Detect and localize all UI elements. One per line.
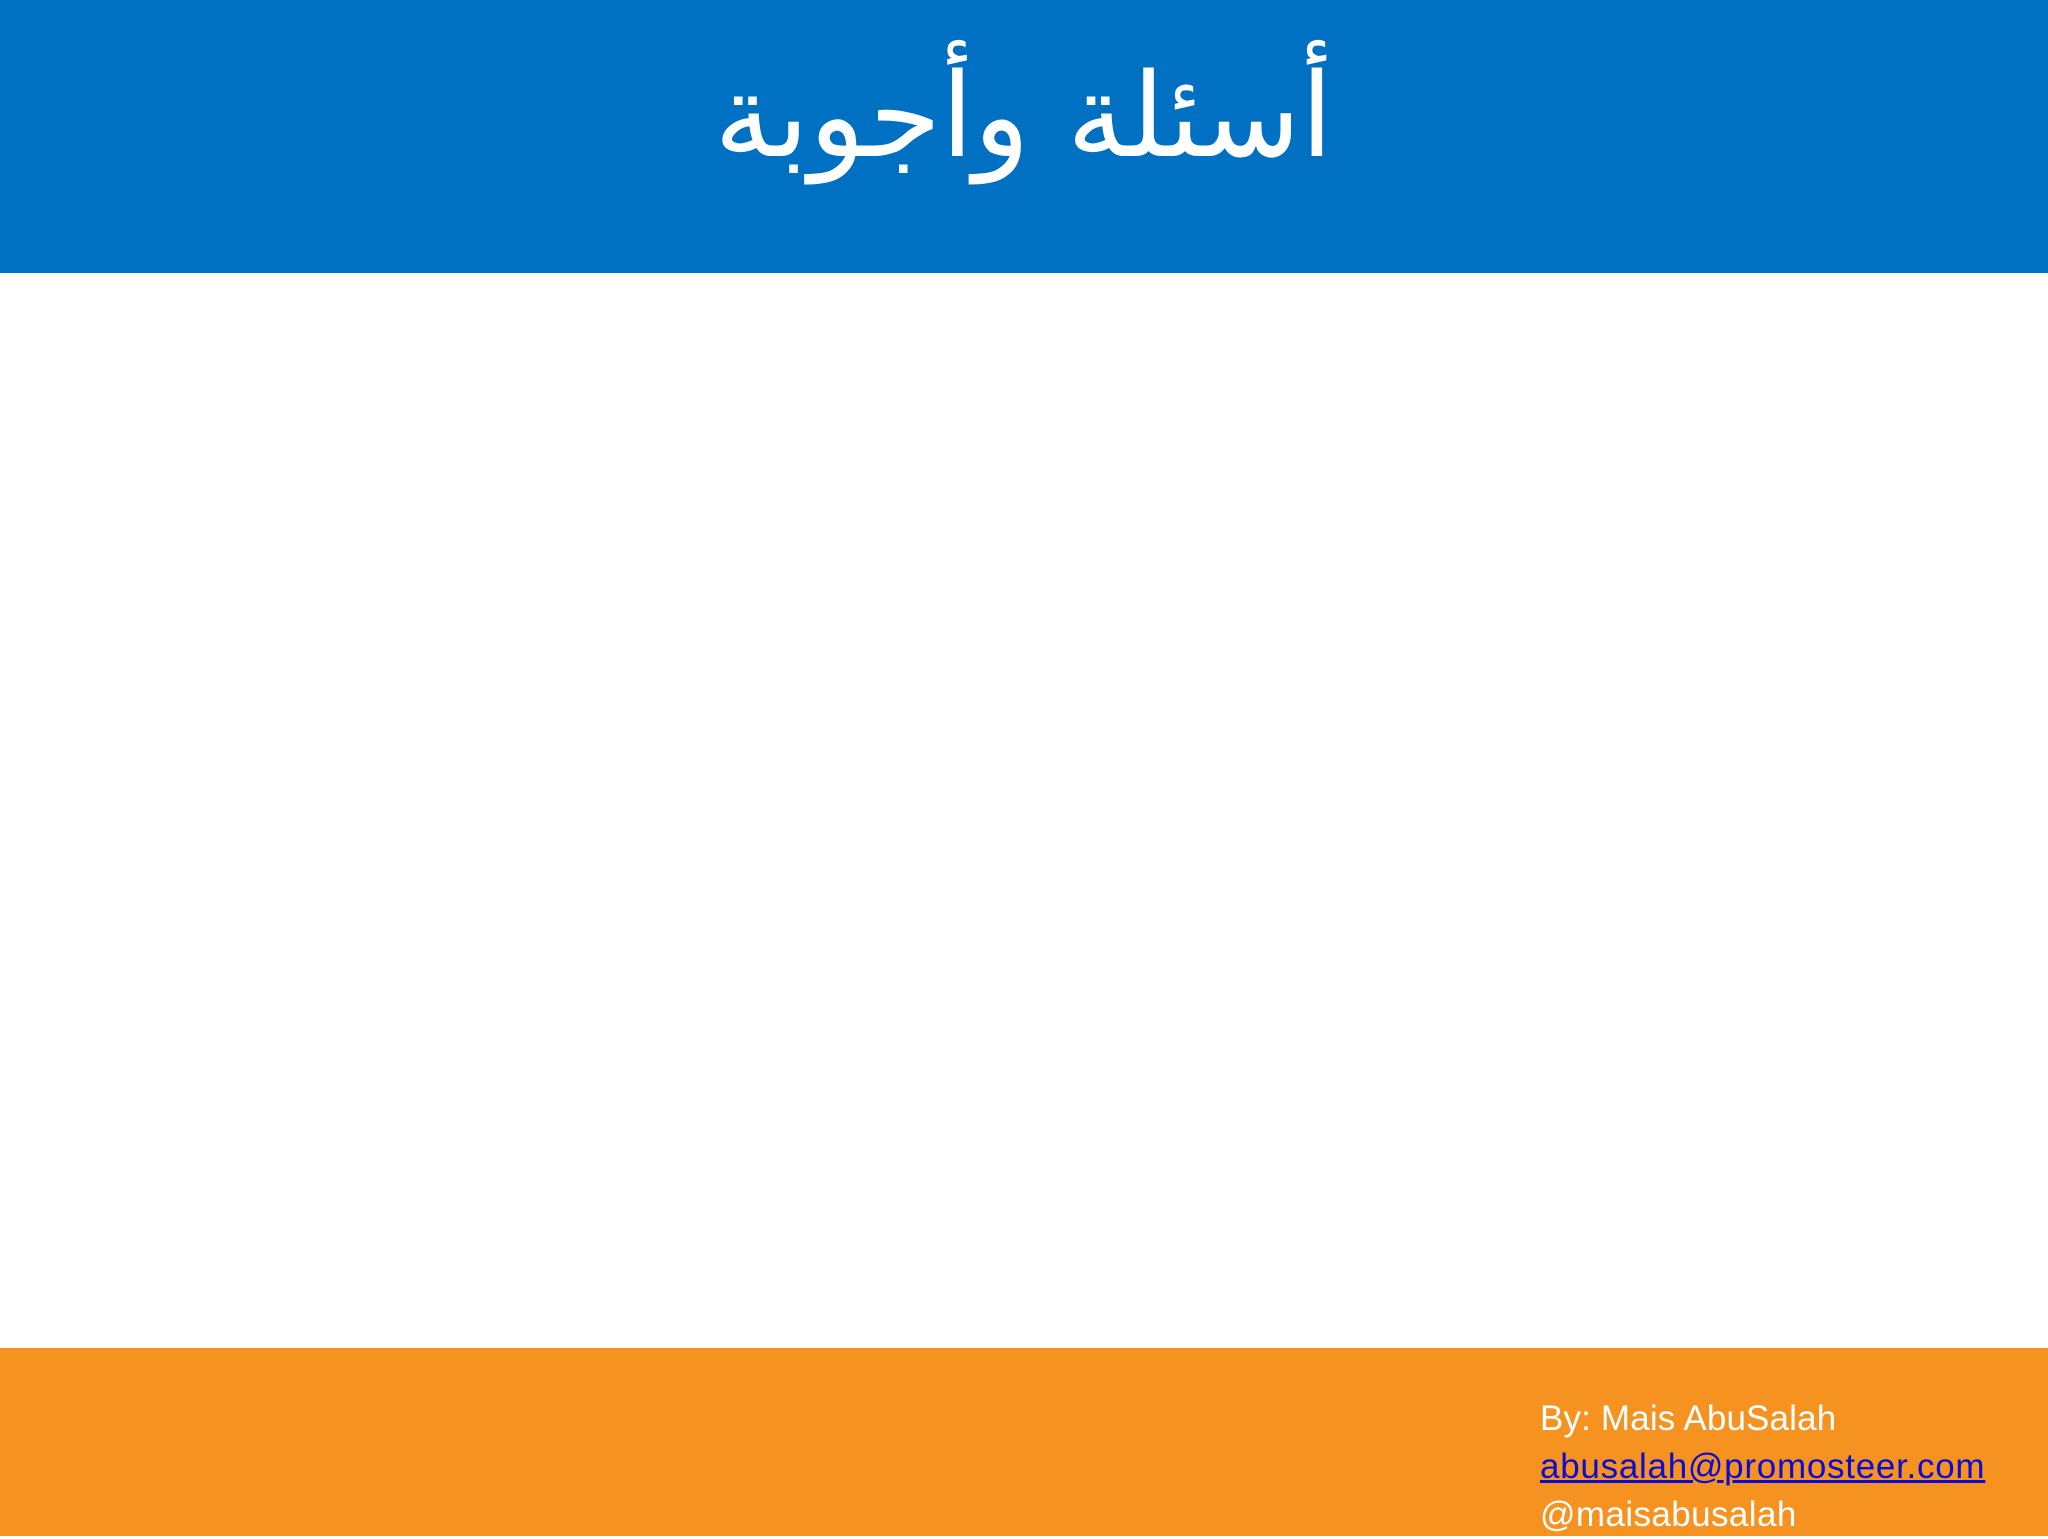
- header band: [0, 0, 2048, 273]
- email link: abusalah@promosteer.com: [1540, 1447, 1985, 1486]
- title: أسئلة وأجوبة: [714, 49, 1333, 184]
- footer band: [0, 1348, 2048, 1536]
- social handle: @maisabusalah: [1540, 1495, 1797, 1534]
- author credit: By: Mais AbuSalah: [1540, 1399, 1836, 1438]
